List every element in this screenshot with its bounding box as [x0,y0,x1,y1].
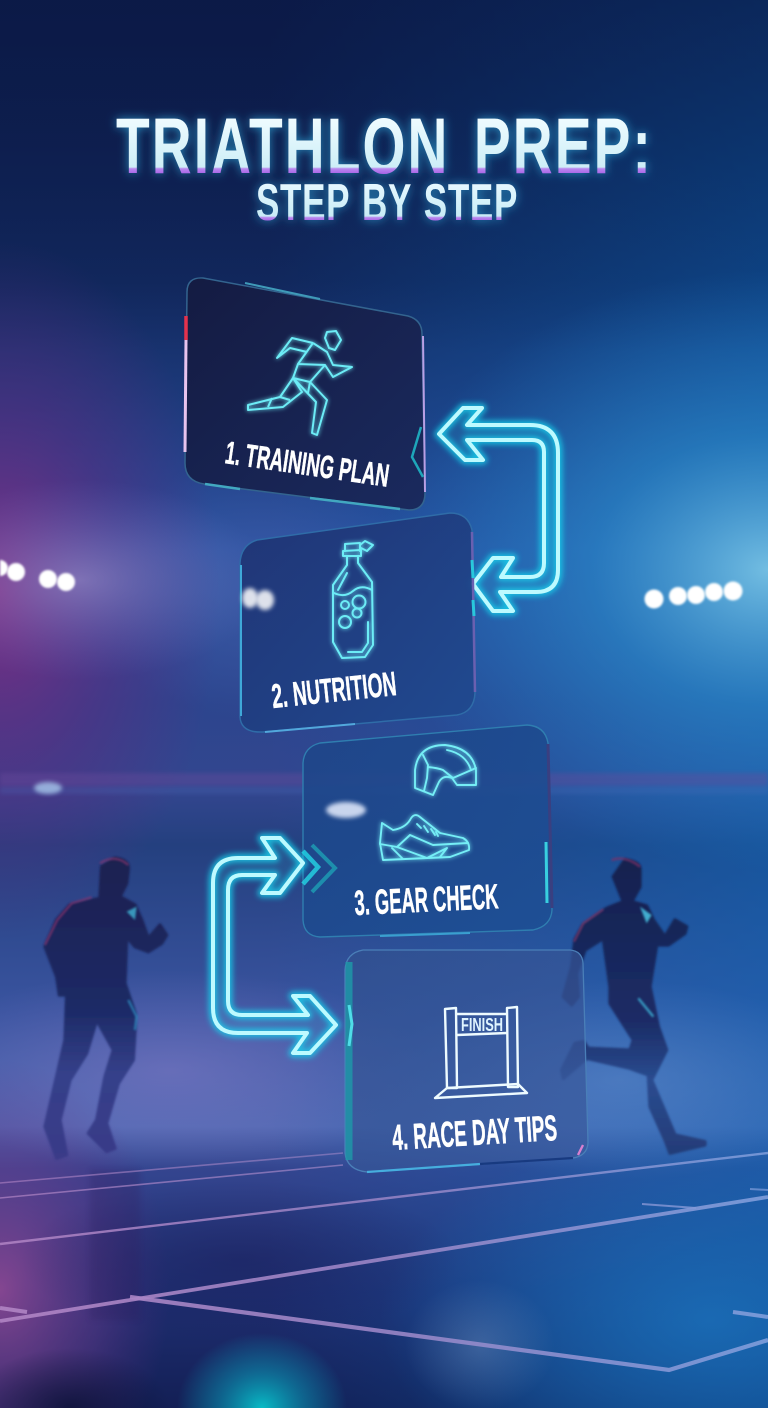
label: step 1: 1. TRAINING PLAN [223,434,391,494]
panel: step 2 nutrition [240,513,475,732]
icon: runner [248,331,352,435]
chevrons at arrow tip [303,845,335,892]
panel: step 1 training plan [185,278,425,510]
stadium lights: left [0,560,75,794]
label: step 2: 2. NUTRITION [270,665,398,716]
title [116,101,653,232]
label: step 3: 3. GEAR CHECK [354,877,499,923]
track lane lines [0,1153,768,1370]
connector arrow: step 3 to step 4 [213,838,336,1053]
icon: running shoe [380,815,469,860]
stadium lights: right [644,582,742,608]
icon: cycling helmet [415,745,476,795]
title line 2: STEP BY STEP [256,174,518,232]
panel: step 4 race day tips [345,950,588,1172]
right runner silhouette [562,858,705,1153]
finish banner text: FINISH [461,1015,503,1035]
icon: sports bottle [333,541,373,658]
icon: finish arch [435,1007,527,1098]
connector arrow: step 1 to step 2 [439,408,558,611]
label: step 4: 4. RACE DAY TIPS [391,1107,558,1158]
panel: step 3 gear check [303,725,552,937]
left runner silhouette [45,858,167,1158]
